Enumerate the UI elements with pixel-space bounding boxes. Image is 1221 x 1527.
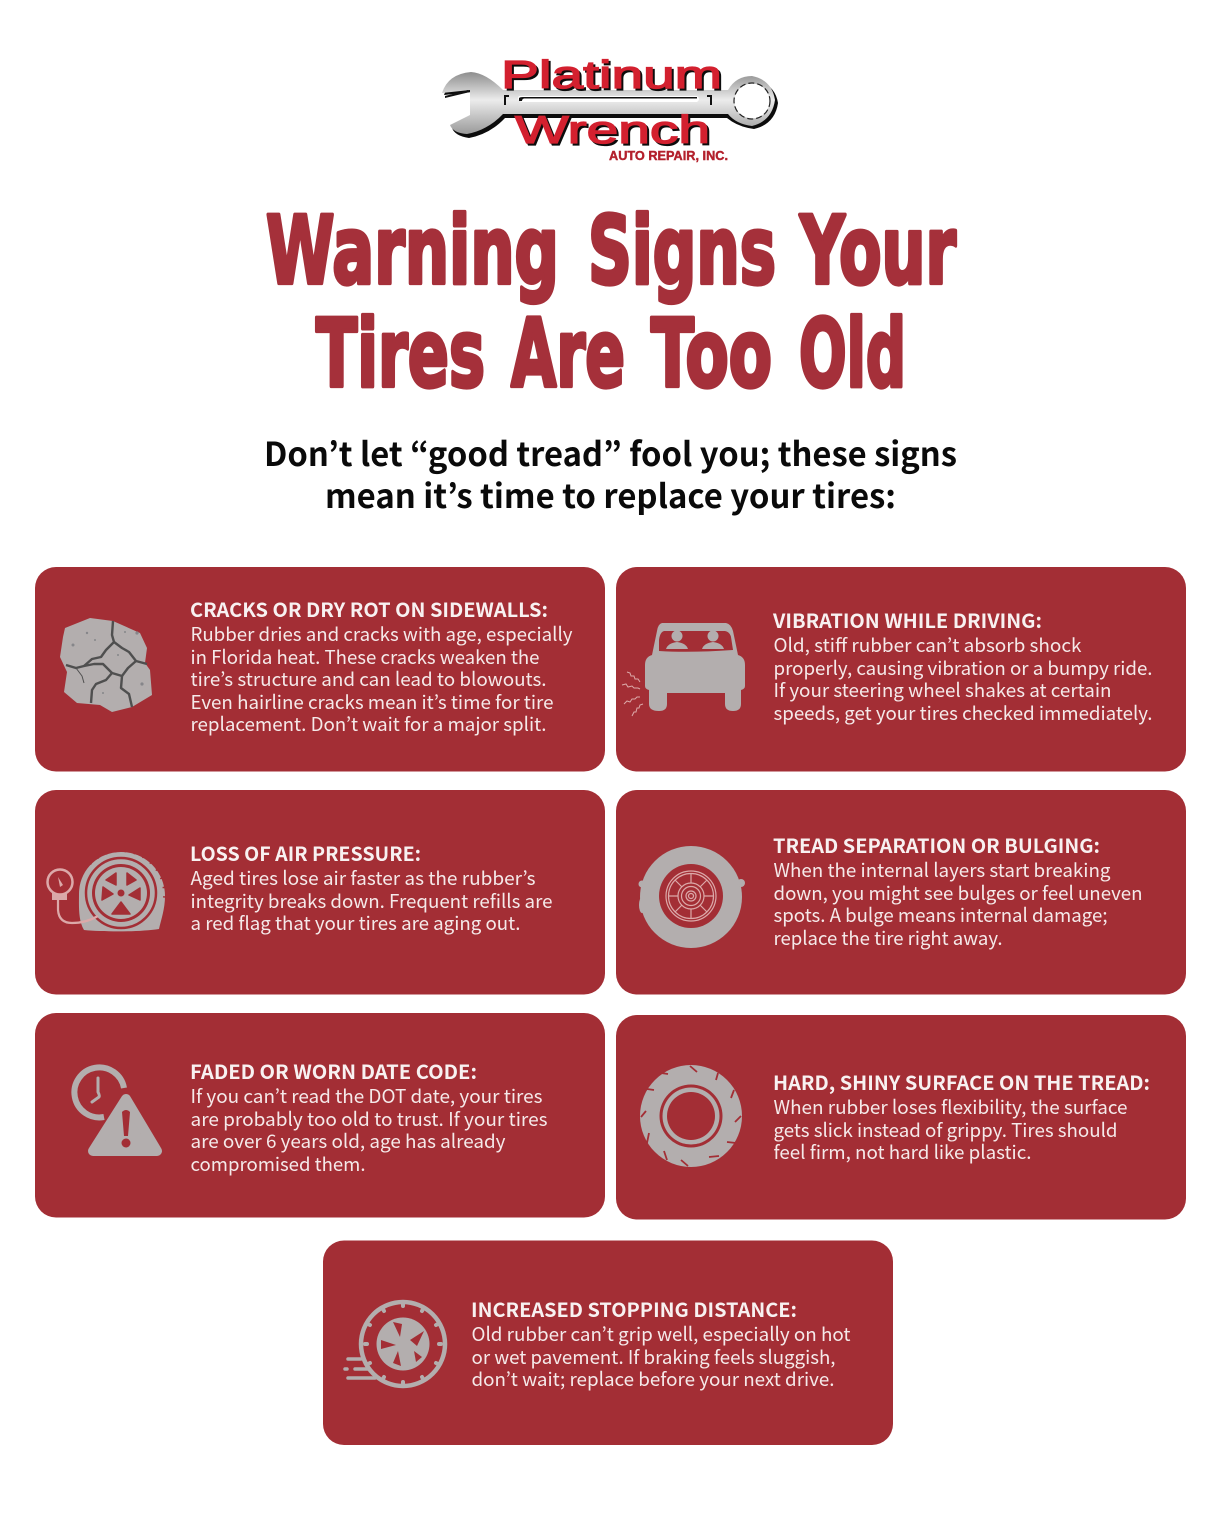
- logo text: Platinum: Platinum: [503, 56, 724, 99]
- panel: hard shiny surface: [616, 1015, 1186, 1220]
- body text: Aged tires lose air faster as the rubber’s: [190, 864, 536, 891]
- title: Signs: [588, 197, 776, 306]
- title: Too: [651, 300, 772, 409]
- icon: car vibrating: [622, 623, 745, 716]
- panel: increased stopping distance: [323, 1240, 893, 1445]
- icon: wrench: [442, 72, 778, 138]
- logo: Platinum Wrench Auto Repair: [442, 54, 778, 163]
- body text: spots. A bulge means internal damage;: [774, 901, 1108, 928]
- icon: clock and warning triangle: [74, 1067, 157, 1151]
- panel: vibration while driving: [616, 567, 1186, 772]
- body text: Rubber dries and cracks with age, especially: [190, 620, 573, 647]
- icon: cracked rubber: [60, 618, 152, 712]
- heading: LOSS OF AIR PRESSURE:: [190, 838, 421, 867]
- body text: [774, 631, 1152, 726]
- title: Tires: [316, 300, 485, 409]
- logo: Platinum Wrench Auto Repair: Platinum: [501, 54, 722, 97]
- body text: down, you might see bulges or feel uneven: [774, 879, 1142, 906]
- body text: [190, 864, 552, 936]
- title: Old: [799, 300, 906, 409]
- body text: speeds, get your tires checked immediately.: [774, 699, 1152, 726]
- body text: a red flag that your tires are aging out.: [190, 909, 520, 936]
- body text: are probably too old to trust. If your tires: [190, 1105, 548, 1132]
- body text: gets slick instead of grippy. Tires should: [774, 1116, 1118, 1143]
- title: Warning: [266, 197, 559, 306]
- body text: are over 6 years old, age has already: [190, 1127, 506, 1154]
- body text: compromised them.: [190, 1150, 366, 1177]
- body text: in Florida heat. These cracks weaken the: [190, 643, 540, 670]
- body text: replacement. Don’t wait for a major split.: [190, 710, 546, 737]
- body text: Even hairline cracks mean it’s time for tire: [190, 688, 554, 715]
- title: [266, 197, 956, 409]
- title: Your: [799, 197, 956, 306]
- heading: CRACKS OR DRY ROT ON SIDEWALLS:: [190, 594, 548, 623]
- body text: If your steering wheel shakes at certain: [774, 676, 1112, 703]
- heading: TREAD SEPARATION OR BULGING:: [773, 830, 1100, 859]
- body text: integrity breaks down. Frequent refills are: [190, 887, 552, 914]
- body text: properly, causing vibration or a bumpy ride.: [774, 654, 1152, 681]
- body text: [190, 1082, 548, 1177]
- body text: Old rubber can’t grip well, especially on hot: [472, 1320, 850, 1347]
- body text: [774, 1093, 1128, 1165]
- body text: When rubber loses flexibility, the surface: [774, 1093, 1128, 1120]
- body text: tire’s structure and can lead to blowouts.: [190, 665, 546, 692]
- icon: worn tire: [640, 1065, 742, 1167]
- heading: HARD, SHINY SURFACE ON THE TREAD:: [773, 1067, 1150, 1096]
- body text: or wet pavement. If braking feels sluggish,: [472, 1343, 836, 1370]
- body text: don’t wait; replace before your next drive.: [472, 1365, 834, 1392]
- heading: VIBRATION WHILE DRIVING:: [772, 605, 1042, 634]
- body text: replace the tire right away.: [774, 924, 1002, 951]
- body text: Old, stiff rubber can’t absorb shock: [774, 631, 1082, 658]
- subtitle: Don’t let “good tread” fool you; these signs: [264, 428, 957, 476]
- logo: Platinum Wrench Auto Repair: Wrench: [515, 109, 710, 152]
- heading: INCREASED STOPPING DISTANCE:: [471, 1294, 797, 1323]
- subtitle: [264, 428, 957, 518]
- logo text: Auto Repair, Inc.: AUTO REPAIR, INC.: [609, 149, 728, 163]
- body text: [774, 856, 1142, 951]
- body text: [472, 1320, 850, 1392]
- body text: [190, 620, 573, 737]
- panel: tread separation or bulging: [616, 790, 1186, 994]
- icon: tire pressure gauge: [48, 851, 165, 931]
- panel: loss of air pressure: [35, 790, 605, 994]
- icon: braking wheel: [345, 1302, 445, 1386]
- body text: When the internal layers start breaking: [774, 856, 1111, 883]
- icon: bulging tire: [638, 846, 745, 948]
- body text: If you can’t read the DOT date, your tires: [190, 1082, 543, 1109]
- heading: FADED OR WORN DATE CODE:: [190, 1056, 477, 1085]
- panel: cracks or dry rot: [35, 567, 605, 772]
- logo text: Wrench: Wrench: [517, 111, 712, 154]
- subtitle: mean it’s time to replace your tires:: [325, 470, 896, 518]
- body text: feel firm, not hard like plastic.: [774, 1138, 1032, 1165]
- title: Are: [511, 300, 625, 409]
- panel: faded or worn date code: [35, 1013, 605, 1218]
